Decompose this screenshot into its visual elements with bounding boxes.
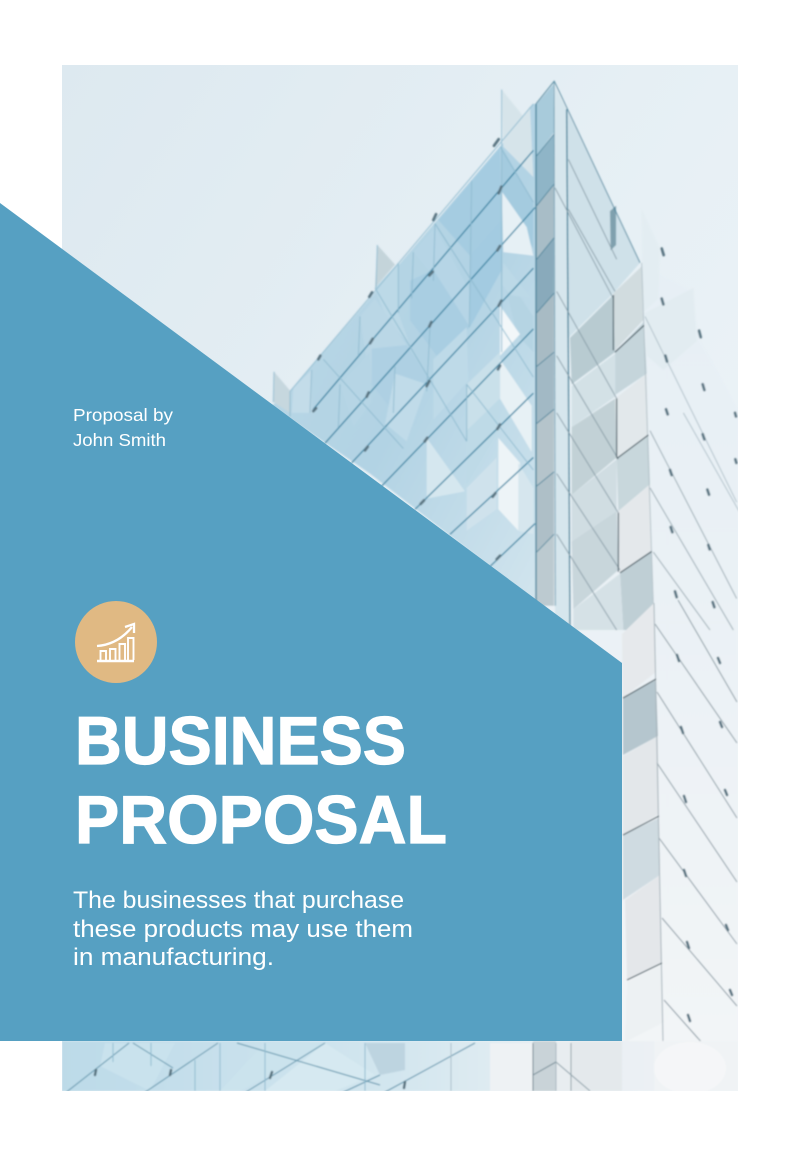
description text: these products may use them bbox=[73, 916, 413, 943]
author text: Proposal by bbox=[73, 405, 173, 425]
light wedges bbox=[502, 191, 533, 256]
right facade panels bbox=[567, 109, 640, 338]
translucent fins right bbox=[645, 288, 697, 370]
lines: left facade bbox=[313, 150, 535, 566]
description text: in manufacturing. bbox=[73, 944, 274, 971]
title: BUSINESS bbox=[75, 703, 406, 779]
icon: growth chart badge bbox=[75, 601, 157, 683]
description text: The businesses that purchase bbox=[73, 887, 404, 914]
brackets bbox=[313, 139, 736, 607]
base strip bbox=[62, 1041, 528, 1091]
lower right panels bbox=[622, 603, 656, 698]
author text bbox=[73, 405, 173, 450]
left facade base bbox=[272, 104, 537, 606]
dark diagonal band bbox=[502, 147, 533, 249]
title: PROPOSAL bbox=[75, 782, 447, 858]
title bbox=[75, 703, 447, 858]
central column bbox=[537, 84, 554, 156]
darker diamonds bbox=[438, 147, 502, 256]
far right light facade bbox=[570, 297, 738, 1039]
author text: John Smith bbox=[73, 430, 166, 450]
description text bbox=[73, 887, 413, 971]
photo: glass building bbox=[62, 65, 740, 1097]
shadow edges bbox=[613, 295, 652, 573]
panel: blue angled block bbox=[0, 203, 622, 1041]
lines: column bbox=[536, 81, 640, 630]
fins bbox=[502, 90, 533, 177]
lines: right facade bbox=[555, 159, 740, 630]
